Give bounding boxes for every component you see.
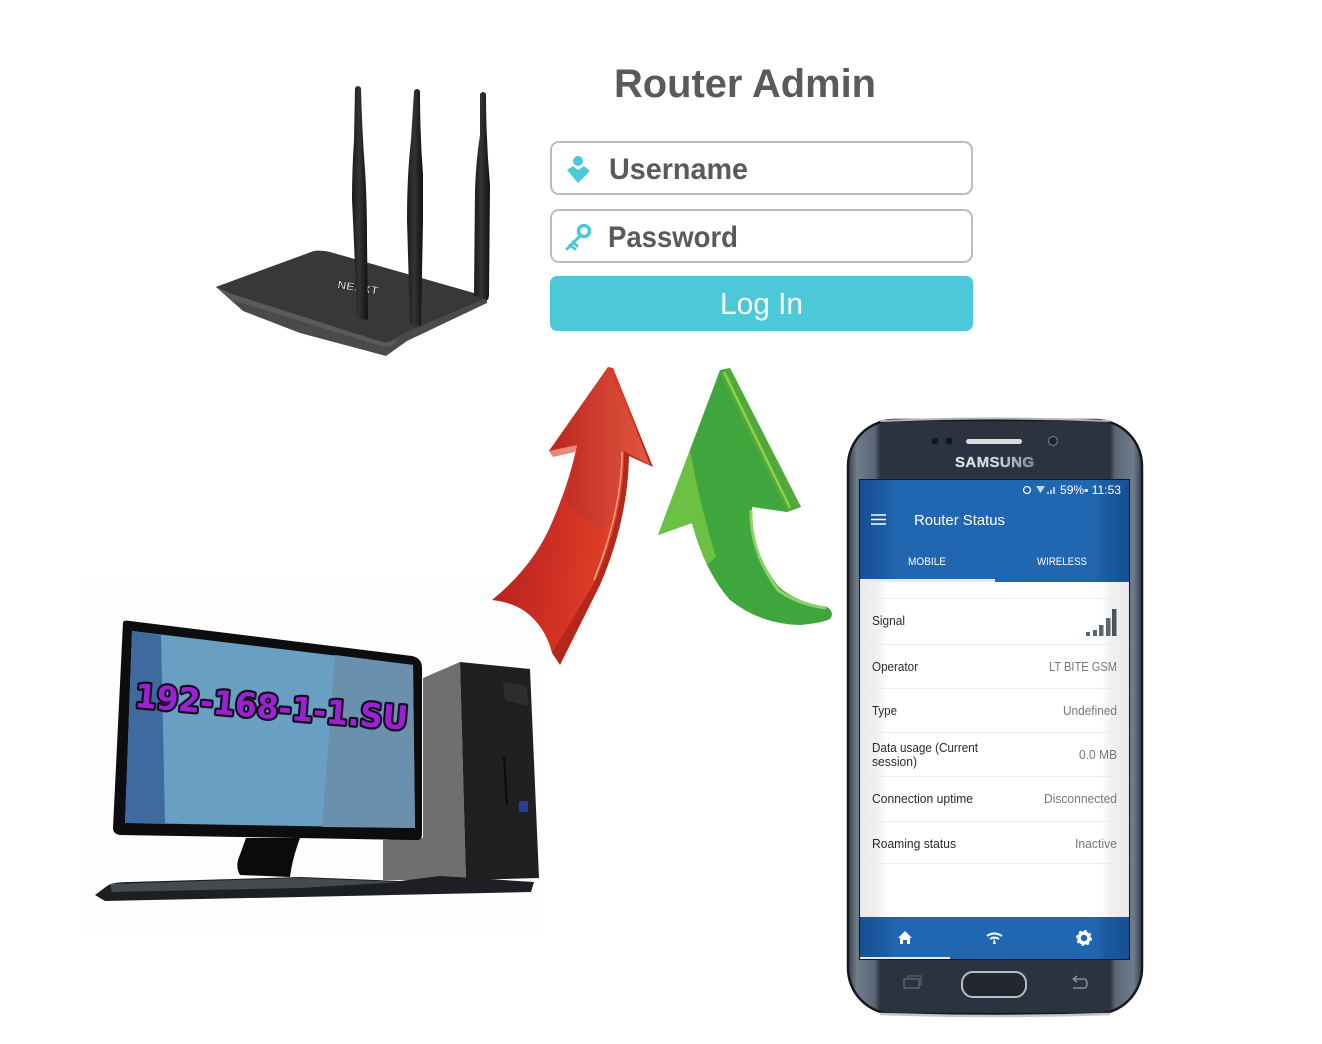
tower [383,662,539,880]
status rows: Signal [872,614,905,628]
status rows: session) [872,755,917,769]
app header [860,480,1129,582]
monitor screen [125,631,415,828]
phone screen [859,479,1130,960]
red arrow [492,367,653,665]
status rows: Operator [872,660,918,674]
monitor stand [237,838,300,877]
router [216,86,490,356]
bottom navigation [860,917,1129,959]
app header: MOBILE [908,556,946,568]
status rows: Undefined [1063,704,1117,718]
screen label: 192-168-1-1.SU [133,676,410,738]
hardware buttons [904,972,1087,997]
status rows: Data usage (Current [872,741,978,755]
status rows: Connection uptime [872,792,973,806]
desktop computer [95,621,539,901]
password field: Password [608,221,738,254]
status rows: Roaming status [872,837,956,851]
app header: Router Status [914,513,1005,529]
log in button: Log In [720,286,803,321]
status rows: Type [872,704,897,718]
title: Router Admin [614,62,876,106]
smartphone [848,418,1142,1016]
status rows: LT BITE GSM [1049,660,1117,674]
log in button [550,276,973,331]
base [95,876,534,901]
antenna right [474,92,490,300]
router logo: NEXXT [337,279,379,297]
monitor frame [113,621,422,840]
status rows [860,598,1129,864]
antenna middle [407,89,423,326]
earpiece and cameras [932,436,1058,446]
app header: 59%▪ 11:53 [1060,485,1121,497]
phone body [848,420,1142,1014]
app header: WIRELESS [1037,556,1087,568]
password field [551,210,972,262]
username field [551,142,972,194]
status rows: Disconnected [1044,792,1117,806]
status rows: Inactive [1075,837,1117,851]
login form [550,142,973,331]
samsung logo: SAMSUNG [955,454,1034,471]
green arrow [658,368,832,625]
username field: Username [609,153,748,186]
status rows: 0.0 MB [1079,748,1117,762]
antenna left [352,86,368,320]
router body [216,251,487,356]
